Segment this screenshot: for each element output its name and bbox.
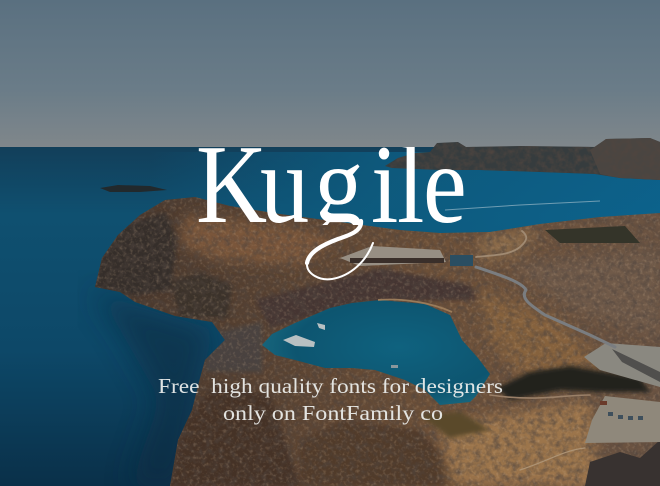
northern bay wake bbox=[445, 201, 600, 210]
cove beach bbox=[378, 300, 452, 312]
subtitle: Free high quality fonts for designers bbox=[158, 374, 503, 398]
subtitle: only on FontFamily co bbox=[223, 401, 443, 425]
shadow under cliffs bbox=[90, 290, 215, 486]
dark scrub bbox=[497, 366, 650, 400]
rocks bottom right bbox=[585, 440, 660, 486]
boats bbox=[283, 323, 398, 368]
roads bbox=[476, 231, 615, 470]
subtitle bbox=[158, 374, 503, 425]
buildings bbox=[340, 246, 446, 266]
cliff shadows bbox=[95, 212, 478, 486]
title: Kugile bbox=[198, 147, 464, 280]
texture bbox=[96, 207, 660, 486]
brown highlands bbox=[180, 215, 660, 486]
sea bbox=[0, 147, 660, 486]
upper car park bbox=[584, 343, 660, 387]
title swash of the g bbox=[307, 221, 373, 279]
cove water bbox=[262, 300, 490, 405]
far headland bbox=[385, 138, 660, 180]
land mass bbox=[95, 197, 660, 486]
northern bay water bbox=[150, 152, 660, 240]
car park bbox=[585, 396, 660, 443]
sky bbox=[0, 0, 660, 148]
title: Kugile: Kugile bbox=[196, 122, 467, 246]
small island bbox=[100, 185, 167, 192]
